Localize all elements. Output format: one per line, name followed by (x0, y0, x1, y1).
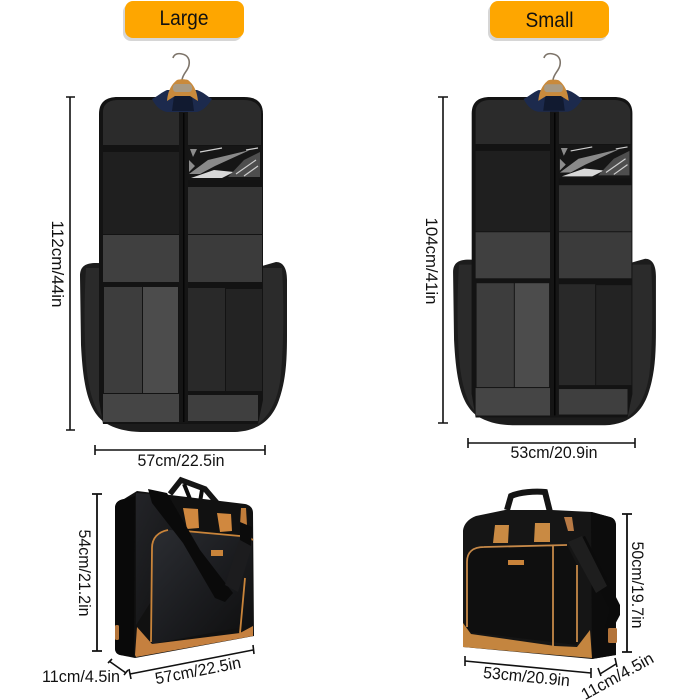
closed garment bag: small (463, 492, 620, 659)
side panel (115, 496, 135, 657)
bag body (99, 97, 263, 424)
buckle (564, 517, 574, 531)
handle (507, 492, 550, 512)
height dimension: small closed bag (622, 514, 646, 652)
centre zipper (179, 112, 188, 423)
upper panels (103, 100, 179, 145)
brand label (508, 560, 524, 565)
lower left pockets (104, 287, 142, 393)
size label: Large (123, 1, 244, 41)
strap pad (225, 538, 252, 592)
hanger hook (173, 54, 189, 80)
width dimension: large open bag: 57cm/22.5in (138, 452, 224, 470)
size label: Small (488, 1, 609, 41)
front pocket (467, 545, 577, 645)
handle (170, 480, 223, 510)
left mesh pocket (103, 152, 179, 234)
clear window pocket (187, 146, 262, 180)
shoulder strap (148, 489, 233, 602)
orange trim (467, 545, 577, 646)
width dimension: small open bag: 53cm/20.9in (510, 444, 598, 462)
body (115, 491, 254, 658)
width dimension: large open bag (95, 445, 265, 470)
depth dimension: large closed bag (42, 659, 128, 686)
depth dimension: large closed bag: 11cm/4.5in (42, 668, 120, 686)
front pocket (152, 530, 253, 644)
orange trim (151, 530, 253, 642)
wooden hanger (167, 79, 198, 101)
height dimension: large closed bag: 54cm/21.2in (75, 530, 93, 616)
open garment bag: large (80, 54, 287, 432)
middle panels (103, 235, 179, 282)
collar (152, 90, 212, 112)
height dimension: large open bag: 112cm/44in (48, 220, 66, 308)
height dimension: large open bag (48, 97, 75, 430)
lower right mesh pockets (187, 288, 225, 391)
width dimension: large closed bag: 57cm/22.5in (154, 654, 242, 688)
side wings (80, 262, 287, 432)
right pocket (188, 187, 262, 234)
side tag (608, 628, 617, 643)
closed garment bag: large (115, 480, 254, 658)
leather base (463, 623, 592, 658)
height dimension: small closed bag: 50cm/19.7in (628, 542, 646, 628)
leather tabs (493, 523, 550, 543)
width dimension: large closed bag (129, 645, 254, 688)
width dimension: small open bag (468, 438, 635, 462)
width dimension: small closed bag (465, 656, 591, 690)
shoulder strap (574, 536, 620, 630)
leather base (135, 626, 253, 657)
strap pad (568, 536, 607, 593)
size label: Large: Large (160, 7, 208, 30)
size label: Small: Small (526, 9, 574, 32)
side tag (115, 625, 119, 640)
leather tabs (183, 508, 232, 532)
body (463, 510, 616, 659)
width dimension: small closed bag: 53cm/20.9in (482, 664, 571, 690)
side panel (591, 512, 616, 659)
height dimension: large closed bag (75, 494, 102, 651)
brand label (211, 550, 223, 556)
height dimension: small open bag: 104cm/41in (422, 217, 440, 305)
height dimension: small open bag (422, 97, 448, 423)
open garment bag: small (453, 54, 656, 425)
upper front (136, 493, 200, 625)
